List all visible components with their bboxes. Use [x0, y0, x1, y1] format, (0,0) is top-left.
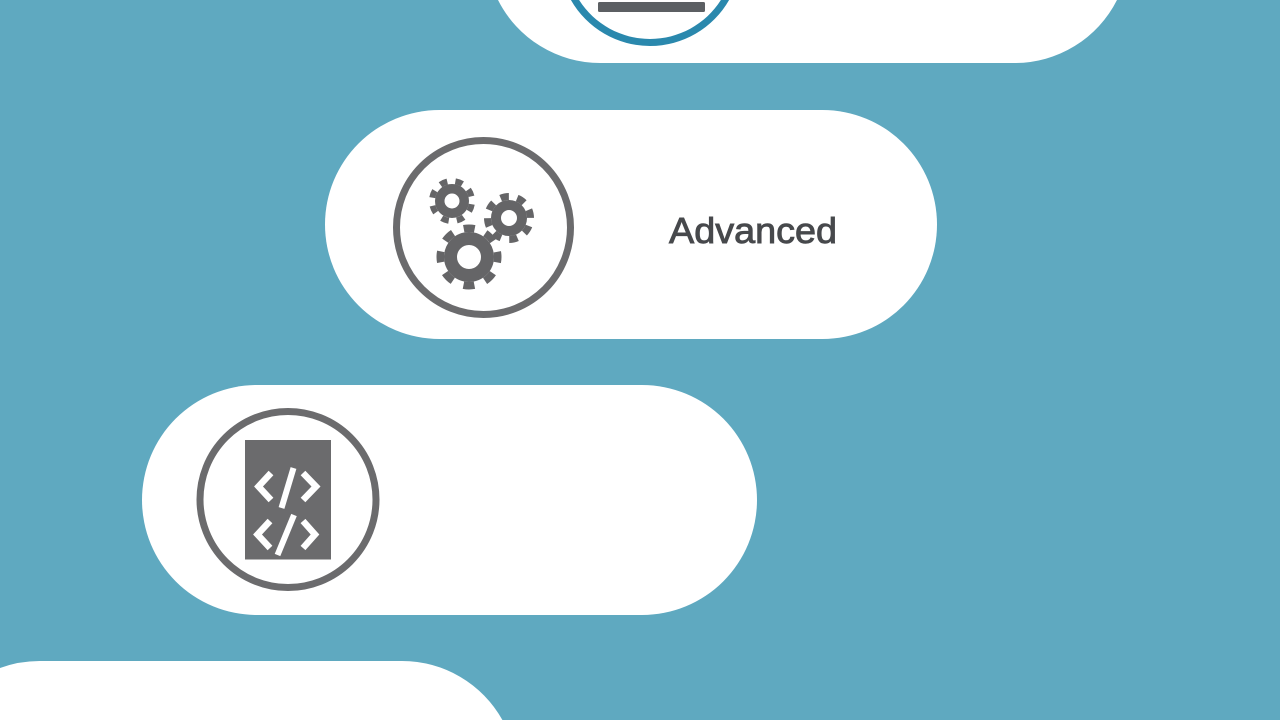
panel: bottom pill (cropped): [0, 661, 502, 720]
icon: code document in circle: [200, 412, 376, 588]
panel: code pill: [142, 385, 757, 615]
panel: top pill (cropped): [498, 0, 1117, 63]
icon: laptop in blue circle (cropped): [571, 0, 729, 46]
icon: small gear: [432, 181, 472, 221]
panel: Advanced pill: [325, 110, 937, 339]
label: Advanced: Advanced: [669, 210, 837, 251]
icon: medium gear: [488, 196, 530, 240]
icon: gears in circle: [396, 140, 570, 314]
icon: large gear: [440, 228, 498, 286]
